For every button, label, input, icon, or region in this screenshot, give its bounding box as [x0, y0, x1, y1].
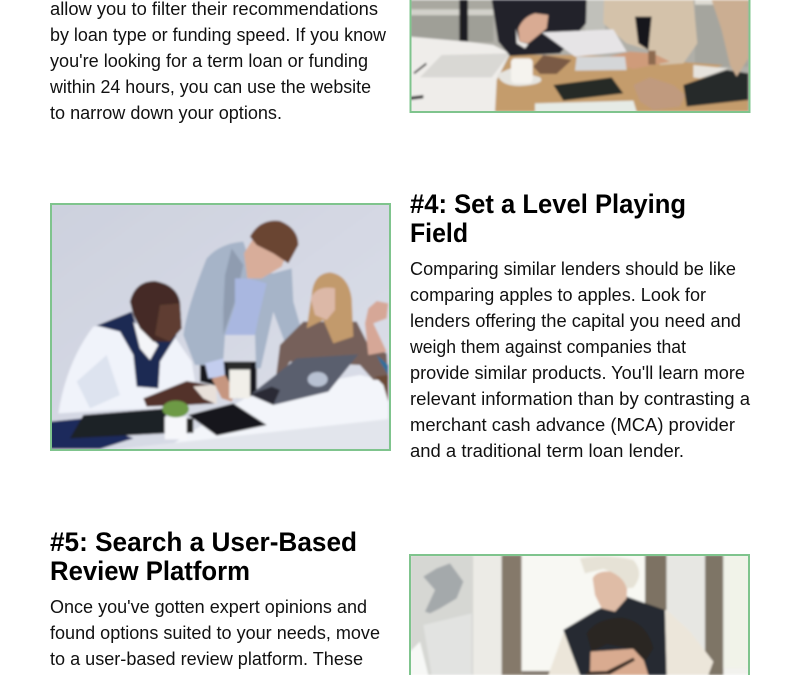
text block: filter recommendations paragraph: by loan type or funding speed. If you know: [50, 25, 387, 45]
text block: level playing field paragraph: lenders offering the capital you need and: [410, 311, 741, 331]
heading: #4 Set a Level Playing Field: #4: Set a Level Playing: [410, 189, 686, 219]
text block: level playing field paragraph: merchant cash advance (MCA) provider: [410, 415, 735, 435]
text block: filter recommendations paragraph: to narrow down your options.: [50, 103, 282, 123]
text block: level playing field paragraph: comparing apples to apples. Look for: [410, 285, 706, 305]
heading: #5 Search a User-Based Review Platform: [50, 527, 357, 586]
text block: level playing field paragraph: [409, 259, 751, 461]
text block: user-based review paragraph: found options suited to your needs, move: [50, 623, 380, 643]
photo: two colleagues reviewing work at an office window: [410, 555, 750, 675]
text block: level playing field paragraph: relevant information than by contrasting a: [410, 389, 751, 409]
photo border: [410, 555, 749, 675]
text block: user-based review paragraph: [50, 597, 380, 669]
heading: #5 Search a User-Based Review Platform: Review Platform: [50, 556, 250, 586]
photo: business meeting around a table with documents: [410, 0, 750, 112]
text block: level playing field paragraph: Comparing similar lenders should be like: [410, 259, 736, 279]
photo border: [410, 0, 750, 112]
text block: level playing field paragraph: provide similar products. You'll learn more: [410, 363, 745, 383]
text block: level playing field paragraph: weigh them against companies that: [409, 337, 686, 357]
text block: user-based review paragraph: Once you've gotten expert opinions and: [50, 597, 367, 617]
text block: user-based review paragraph: to a user-based review platform. These: [50, 649, 363, 669]
photo: three colleagues around a laptop: [50, 203, 392, 452]
heading: #5 Search a User-Based Review Platform: #5: Search a User-Based: [50, 527, 357, 557]
text block: filter recommendations paragraph: within 24 hours, you can use the website: [49, 77, 371, 97]
text block: level playing field paragraph: and a traditional term loan lender.: [410, 441, 684, 461]
photo border: [51, 204, 390, 450]
text block: filter recommendations paragraph: [49, 0, 387, 123]
heading: #4 Set a Level Playing Field: [410, 189, 686, 248]
text block: filter recommendations paragraph: you're looking for a term loan or funding: [50, 51, 368, 71]
heading: #4 Set a Level Playing Field: Field: [410, 218, 468, 248]
